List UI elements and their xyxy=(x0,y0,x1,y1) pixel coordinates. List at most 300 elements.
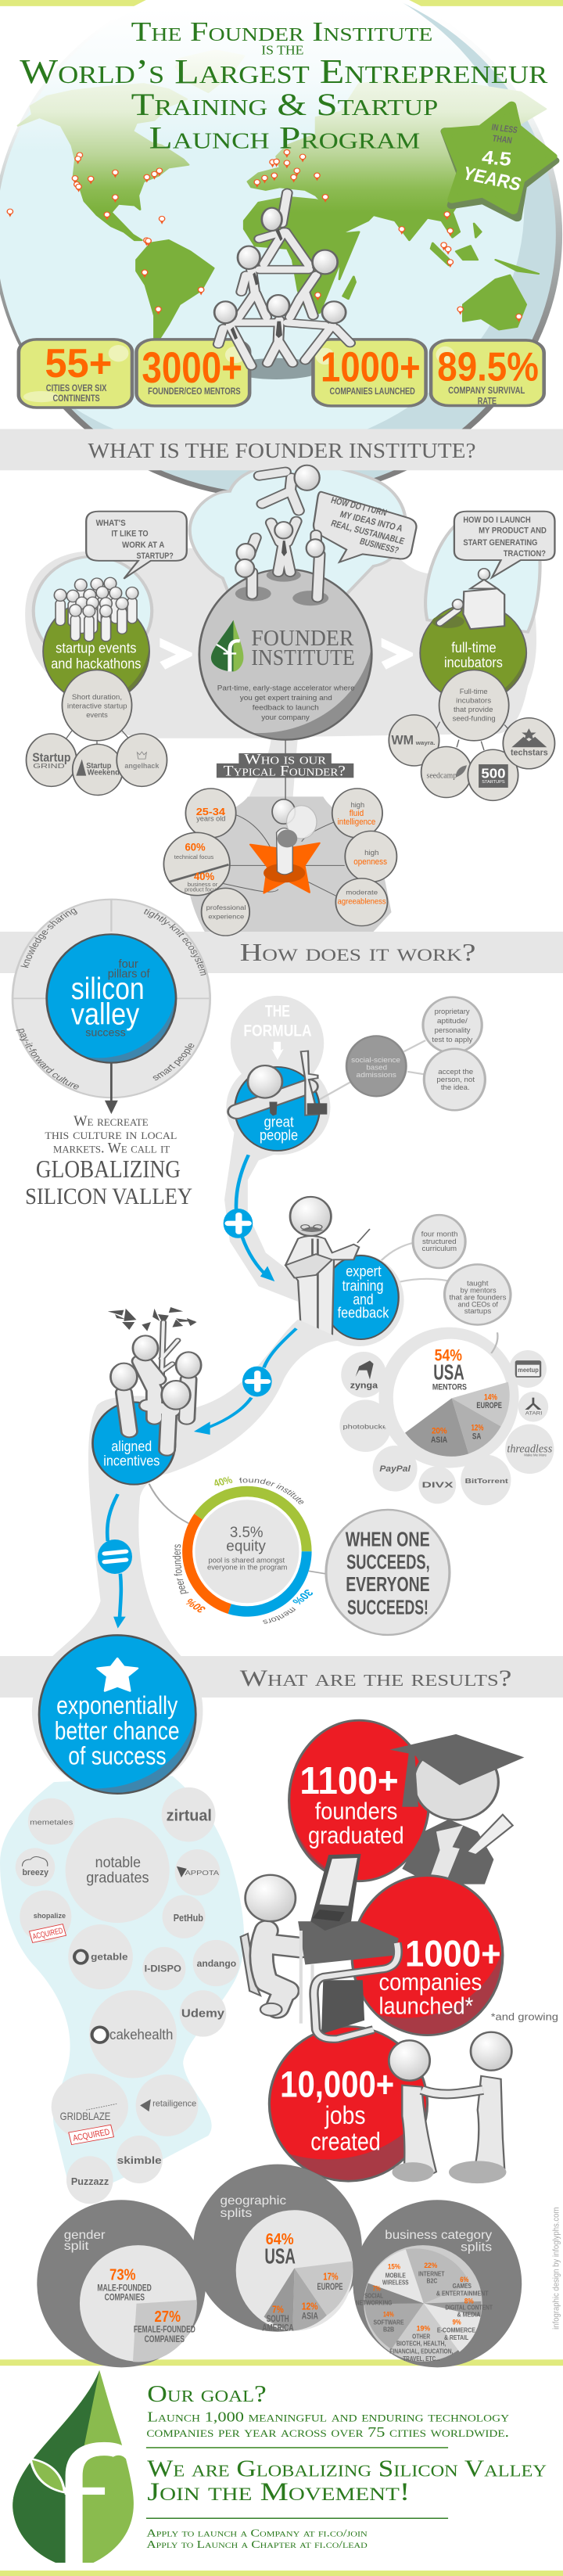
circle: accept the person: person, not xyxy=(436,1076,475,1083)
connector lines xyxy=(66,722,510,750)
trait: technical focus: 40% xyxy=(194,871,215,882)
logo circle: startup weekend: Weekend xyxy=(88,768,120,777)
panel: gender split: FEMALE-FOUNDED xyxy=(134,2324,195,2334)
panel: business category splits: INTERNET xyxy=(418,2271,444,2278)
logo: divx: DIVX xyxy=(422,1481,454,1489)
logo circle: startup weekend xyxy=(73,744,123,795)
logo: breezy xyxy=(16,1848,55,1886)
star badge: in less than 4.5 years: IN LESS xyxy=(491,122,518,135)
red circle: founders graduated: founders xyxy=(315,1798,397,1825)
logo: paypal xyxy=(373,1446,418,1492)
speech bubble: centre: MY IDEAS INTO A xyxy=(339,509,404,534)
circle: curriculum: four month xyxy=(421,1231,458,1238)
panel: geographic splits: 17% xyxy=(323,2272,339,2283)
panel: geographic splits: 64% xyxy=(266,2230,294,2247)
blue ball: exponentially better chance of success: of success xyxy=(68,1742,167,1770)
trait: professional experience: professional xyxy=(206,904,246,911)
badge: 89.5% survival xyxy=(431,340,544,406)
panel: geographic splits: EUROPE xyxy=(317,2281,343,2291)
founder with star and lightbulb xyxy=(250,799,320,893)
arrow down xyxy=(106,1063,117,1112)
speech bubble: centre: HOW DO I TURN xyxy=(330,495,388,518)
panel: geographic splits: AMERICA xyxy=(262,2323,294,2333)
trait: openness xyxy=(345,831,396,882)
panel: business category splits: E-COMMERCE xyxy=(437,2326,475,2334)
panel: business category splits: FINANCIAL, EDUCATION, xyxy=(389,2348,454,2355)
handshake figures xyxy=(389,2032,511,2177)
logo: memetales xyxy=(28,1798,75,1845)
logo: paypal: PayPal xyxy=(379,1464,411,1473)
panel: business category splits: B2C xyxy=(427,2278,437,2285)
trait: openness: high xyxy=(364,850,378,857)
laptop figure xyxy=(241,1854,399,2039)
logo: i-dispo: I-DISPO xyxy=(145,1963,181,1974)
blue arrow with plus xyxy=(194,1328,296,1435)
blue ball: aligned incentives: incentives xyxy=(103,1453,160,1468)
circle: taught by mentors: startups xyxy=(464,1308,491,1316)
title: The Founder Institute xyxy=(131,16,432,47)
quote circle: SUCCEEDS, xyxy=(346,1550,430,1573)
logo circle: wayra xyxy=(389,715,439,766)
apply links: Apply to launch a Company at fi.co/join xyxy=(146,2527,368,2539)
badge: 55+ cities xyxy=(19,340,132,408)
panel: business category splits: BIOTECH, HEALTH, xyxy=(396,2341,446,2348)
equity donut chart: 30% xyxy=(289,1587,315,1607)
badge: 1000+ companies: 1000+ xyxy=(321,344,421,391)
figures on sphere xyxy=(235,465,325,598)
panel: business category splits: OTHER xyxy=(412,2333,430,2341)
logo: shopalize with acquired stamp xyxy=(20,1891,71,1943)
section band: results xyxy=(0,1656,563,1698)
badge: 1000+ companies xyxy=(313,340,426,406)
link to equity xyxy=(149,1484,188,1523)
panel: business category splits xyxy=(353,2200,522,2367)
circle: curriculum xyxy=(413,1215,465,1268)
central sphere: Part-time, early-stage accelerator where xyxy=(217,684,355,692)
title: Training & Startup xyxy=(131,88,438,123)
section: aligned incentives and equity xyxy=(53,1314,554,1656)
circle: taught by mentors xyxy=(444,1264,511,1325)
logo: zirtual: zirtual xyxy=(167,1806,212,1824)
panel: business category splits: 14% xyxy=(383,2311,394,2319)
globalizing text xyxy=(25,1112,192,1209)
title: IS THE xyxy=(261,44,303,58)
chevron right xyxy=(382,638,413,670)
panel: gender split: gender xyxy=(64,2228,106,2242)
figure at podium xyxy=(432,569,504,629)
trait: age: years old xyxy=(196,816,225,823)
logo: threadless: Make Me More xyxy=(524,1453,547,1457)
four pillars diagram: knowledge-sharing xyxy=(20,908,77,968)
trait: technical focus: business or xyxy=(188,882,218,888)
speech bubble: centre: BUSINESS? xyxy=(358,536,400,555)
blue ball: exponentially better chance of success xyxy=(32,1629,203,1794)
section heading: WHAT IS THE FOUNDER INSTITUTE? xyxy=(88,439,475,462)
circle: notable graduates: graduates xyxy=(86,1869,149,1886)
globe xyxy=(0,0,559,497)
circle: notable graduates: notable xyxy=(95,1853,141,1871)
mentors pie: MENTORS xyxy=(432,1382,467,1392)
logo: gridblaze with acquired stamp xyxy=(52,2074,128,2145)
panel: geographic splits: USA xyxy=(264,2244,296,2269)
title xyxy=(20,16,547,156)
logo: gridblaze with acquired stamp: ACQUIRED xyxy=(72,2127,111,2143)
logo: photobucket: photobucket xyxy=(343,1424,389,1431)
four pillars diagram: smart people xyxy=(153,1044,194,1080)
circle: notable graduates xyxy=(66,1818,170,1923)
panel: gender split xyxy=(37,2200,206,2367)
red circle: jobs created: jobs xyxy=(325,2101,365,2129)
badge: 89.5% survival: RATE xyxy=(478,395,497,406)
circle: aptitude test xyxy=(423,997,482,1053)
blue ball: aligned incentives xyxy=(92,1402,175,1485)
panel: gender split: COMPANIES xyxy=(145,2334,185,2344)
logo: breezy: breezy xyxy=(22,1867,48,1877)
logo: divx xyxy=(418,1466,456,1504)
logo circle: techstars: techstars xyxy=(511,748,548,757)
logo: udemy xyxy=(180,1990,226,2037)
icon: Founder Institute leaf logo xyxy=(13,2370,134,2566)
panel: business category splits: 15% xyxy=(388,2263,400,2271)
thin links to founder xyxy=(223,814,345,898)
four pillars diagram: pay-it-forward culture xyxy=(16,1028,79,1089)
red circle: founders graduated: graduated xyxy=(308,1823,404,1849)
info circle: short duration: interactive startup xyxy=(67,702,127,710)
central sphere: INSTITUTE xyxy=(251,645,355,670)
blue ball: great people: people xyxy=(260,1126,298,1144)
section: splits and footer xyxy=(0,2136,563,2576)
circle: accept the person xyxy=(424,1049,485,1110)
grey path ribbon xyxy=(224,1113,298,1302)
panel: business category splits: SOCIAL xyxy=(364,2292,383,2300)
logo: skimble xyxy=(116,2136,163,2183)
graduate figure xyxy=(389,1734,524,1884)
logo: i-dispo xyxy=(142,1947,185,1990)
panel: business category splits: 22% xyxy=(424,2262,438,2269)
logo circle: 500 startups: STARTUPS xyxy=(482,779,505,785)
panel: business category splits: 6% xyxy=(460,2276,469,2283)
speech bubble: right xyxy=(454,512,554,577)
logo: getable: getable xyxy=(91,1951,127,1962)
central sphere: your company xyxy=(261,713,310,722)
panel: gender split: split xyxy=(64,2239,88,2253)
green ball: startup events: startup events xyxy=(56,641,136,656)
speech bubble: what's it like: WORK AT A xyxy=(122,540,164,550)
top band xyxy=(0,0,563,6)
links xyxy=(317,1040,425,1101)
circle: taught by mentors: taught xyxy=(467,1281,489,1288)
logo: bittorrent xyxy=(461,1455,511,1505)
globalizing text: GLOBALIZING xyxy=(36,1155,181,1183)
logo: photobucket xyxy=(339,1399,392,1452)
sky cloud: centre xyxy=(190,464,406,596)
goal text: Our goal? xyxy=(147,2381,267,2407)
logo: getable xyxy=(68,1924,133,1989)
info circle: full-time incubators xyxy=(439,670,509,741)
circle: aptitude test: personality xyxy=(435,1026,471,1035)
goal text xyxy=(146,2381,509,2440)
circle: accept the person: the idea. xyxy=(441,1083,470,1091)
mentors pie xyxy=(378,1328,519,1468)
logo circle: angelhack xyxy=(117,734,167,786)
star badge: in less than 4.5 years: THAN xyxy=(492,133,513,146)
badge: 3000+ mentors: 3000+ xyxy=(142,343,242,392)
trait: age: 25-34 xyxy=(196,807,225,818)
quote circle: SUCCEEDS! xyxy=(347,1596,429,1619)
shadow of handshake figures xyxy=(392,2161,506,2183)
circle: aptitude test: aptitude/ xyxy=(437,1017,468,1025)
bottom band xyxy=(0,2571,563,2576)
logo: zynga xyxy=(341,1352,386,1398)
logo: atari: ATARI xyxy=(525,1410,542,1416)
figure with syringe xyxy=(237,1051,327,1116)
panel: business category splits: SOFTWARE xyxy=(374,2319,404,2326)
info circle: full-time incubators: that provide xyxy=(454,706,493,714)
quote circle xyxy=(326,1510,450,1635)
badge: 55+ cities: CONTINENTS xyxy=(53,393,100,403)
blue ball: great people: great xyxy=(264,1113,294,1130)
mentors pie: EUROPE xyxy=(476,1400,502,1410)
four pillars diagram: four xyxy=(119,958,138,971)
crowd of people xyxy=(54,577,138,638)
speech bubble: what's it like xyxy=(86,512,187,579)
logo: andango xyxy=(193,1940,239,1986)
equity donut chart: mentors xyxy=(263,1607,296,1624)
globalizing text: markets. We call it xyxy=(53,1140,170,1156)
red circle: companies launched: companies xyxy=(378,1969,482,1996)
speech bubble: what's it like: WHAT'S xyxy=(96,518,126,528)
badge: 1000+ companies: COMPANIES LAUNCHED xyxy=(330,386,415,397)
badge: 3000+ mentors: FOUNDER/CEO MENTORS xyxy=(148,386,241,397)
trait: fluid intelligence: intelligence xyxy=(338,817,376,827)
call to action: Join the Movement! xyxy=(147,2477,410,2506)
trait: technical focus: product focus xyxy=(185,886,219,893)
panel: business category splits: DIGITAL CONTENT xyxy=(445,2305,493,2312)
four pillars diagram xyxy=(11,898,211,1098)
links xyxy=(381,1243,447,1282)
circle: aptitude test: test to apply xyxy=(432,1036,473,1044)
panel: gender split: COMPANIES xyxy=(105,2292,145,2302)
logo: skimble: skimble xyxy=(117,2155,162,2166)
logo circle: startup grind: GRIND xyxy=(33,763,65,770)
mentors pie: USA xyxy=(433,1360,464,1384)
circle: taught by mentors: and CEOs of xyxy=(457,1301,498,1309)
link xyxy=(491,1332,497,1353)
halo and blue ball: expert training xyxy=(314,1254,404,1346)
central sphere: you get expert training and xyxy=(240,694,332,702)
panel: geographic splits xyxy=(193,2165,362,2333)
title: Launch Program xyxy=(149,120,420,156)
speech bubble: centre xyxy=(314,492,416,562)
trait: agreeableness: agreeableness xyxy=(338,898,386,906)
link xyxy=(309,1571,325,1574)
trait: openness: openness xyxy=(353,857,387,867)
logo: pethub: PetHub xyxy=(174,1913,203,1924)
equity donut chart: everyone in the program xyxy=(207,1564,287,1572)
logo circle: 500 startups xyxy=(468,749,518,800)
world map continents xyxy=(18,50,546,338)
info circle: full-time incubators: seed-funding xyxy=(453,715,496,723)
group of four figures around tree xyxy=(110,1322,201,1450)
four pillars diagram: pillars of xyxy=(108,968,150,980)
speech bubble: what's it like: STARTUP? xyxy=(136,551,174,561)
logo: pethub xyxy=(163,1895,206,1938)
panel: business category splits: splits xyxy=(461,2240,492,2254)
logo: bittorrent: BitTorrent xyxy=(465,1478,508,1485)
graduate companies xyxy=(16,1787,239,2145)
logo: zynga: zynga xyxy=(350,1380,378,1390)
central sphere: FOUNDER xyxy=(251,626,353,650)
logo: retailigence: retailigence xyxy=(152,2098,196,2108)
panel: business category splits: & ENTERTAINMENT xyxy=(436,2290,489,2298)
trait: technical focus: 60% xyxy=(185,841,206,853)
panel: business category splits: WIRELESS xyxy=(382,2279,409,2287)
logo: shopalize with acquired stamp: ACQUIRED xyxy=(31,1927,64,1942)
equity donut chart: peer founders xyxy=(172,1544,189,1594)
goal text: companies per year across over 75 cities worldwide. xyxy=(146,2425,509,2440)
logo circle: techstars xyxy=(503,718,554,769)
apply links: Apply to Launch a Chapter at fi.co/lead xyxy=(146,2539,368,2550)
trait: technical focus: technical focus xyxy=(174,853,213,860)
trait: fluid intelligence xyxy=(332,789,382,838)
goal text: Launch 1,000 meaningful and enduring technology xyxy=(147,2410,509,2425)
section: how does it work xyxy=(11,878,512,1346)
logo circle: angelhack: angelhack xyxy=(124,763,160,771)
halo and blue ball: expert training: feedback xyxy=(338,1304,389,1321)
star badge: in less than 4.5 years: 4.5 xyxy=(481,146,513,170)
panel: business category splits: 19% xyxy=(417,2325,431,2333)
logo: atari xyxy=(518,1392,548,1422)
circle: admissions: based xyxy=(366,1064,387,1072)
formula bubble xyxy=(226,996,330,1155)
halo and blue ball: expert training: training xyxy=(342,1277,383,1294)
logo: meetup: meetup xyxy=(518,1367,539,1374)
logo circle: seedcamp: seedcamp xyxy=(427,771,457,780)
blue ball: exponentially better chance of success: better chance xyxy=(55,1717,180,1745)
mentor logos xyxy=(339,1350,554,1505)
sky cloud: right xyxy=(425,521,540,632)
circle: taught by mentors: that are founders xyxy=(449,1294,506,1302)
four pillars diagram: silicon xyxy=(71,972,145,1006)
grey ribbon xyxy=(50,1320,345,1658)
panel: business category splits: MOBILE xyxy=(385,2272,406,2280)
section: what is the founder institute xyxy=(0,429,563,932)
heading: what are the results: What are the results? xyxy=(240,1665,511,1691)
trait: technical focus xyxy=(163,832,230,896)
trait: fluid intelligence: fluid xyxy=(350,808,364,818)
circle: admissions: admissions xyxy=(357,1071,396,1080)
panel: business category splits: & RETAIL xyxy=(444,2334,468,2342)
quote circle: WHEN ONE xyxy=(346,1528,430,1550)
central sphere: feedback to launch xyxy=(253,703,319,712)
trait: professional experience xyxy=(202,888,249,936)
formula bubble: THE xyxy=(265,1002,290,1021)
red circle: founders graduated xyxy=(289,1720,429,1881)
info circle: full-time incubators: Full-time xyxy=(460,688,488,696)
heading: who is our typical founder: Who is our xyxy=(244,750,326,767)
sky cloud: left xyxy=(34,556,152,666)
circle: accept the person: accept the xyxy=(438,1068,473,1076)
central sphere xyxy=(199,569,371,740)
info circle: short duration xyxy=(62,670,132,741)
red circle: founders graduated: 1100+ xyxy=(299,1760,399,1802)
panel: business category splits: business category xyxy=(385,2228,493,2242)
mentors pie: 14% xyxy=(484,1392,497,1402)
blue ball: aligned incentives: aligned xyxy=(111,1438,152,1454)
panel: business category splits: & MEDIA xyxy=(457,2312,480,2319)
logo: appota xyxy=(175,1849,220,1895)
panel: business category splits: B2B xyxy=(383,2326,394,2333)
mentors pie: ASIA xyxy=(431,1435,447,1444)
logo: andango: andango xyxy=(197,1958,236,1969)
red circle: companies launched xyxy=(352,1876,503,2035)
logo: zirtual xyxy=(162,1787,216,1841)
blue ball: great people xyxy=(235,1067,320,1151)
credit: infographic design by infoglyphs.com xyxy=(552,2208,561,2330)
red circle: companies launched: 1000+ xyxy=(405,1932,501,1974)
tree leaves top xyxy=(108,1307,195,1322)
trait: age xyxy=(185,789,236,838)
star badge: in less than 4.5 years xyxy=(445,105,554,218)
panel: geographic splits: splits xyxy=(220,2206,252,2220)
logo: udemy: Udemy xyxy=(181,2007,224,2020)
halo and blue ball: expert training: and xyxy=(353,1291,374,1308)
connector stem xyxy=(285,740,287,799)
four pillars diagram: valley xyxy=(71,998,140,1031)
panel: business category splits: 8% xyxy=(464,2298,474,2305)
panel: gender split: MALE-FOUNDED xyxy=(97,2283,152,2293)
city pins xyxy=(7,149,522,322)
speech bubble: centre: REAL, SUSTAINABLE xyxy=(330,519,406,546)
panel: geographic splits: 7% xyxy=(272,2305,284,2316)
globalizing text: this culture in local xyxy=(45,1126,177,1142)
green ball: startup events: and hackathons xyxy=(51,656,141,672)
quote circle: EVERYONE xyxy=(346,1573,430,1596)
logo: memetales: memetales xyxy=(30,1819,73,1827)
formula bubble: FORMULA xyxy=(243,1022,312,1040)
divider xyxy=(146,2447,448,2448)
red circle: jobs created: 10,000+ xyxy=(280,2063,394,2105)
trait: agreeableness xyxy=(335,878,387,926)
professor figure xyxy=(285,1197,370,1342)
equity donut chart: 3.5% xyxy=(230,1524,264,1540)
circle: curriculum: structured xyxy=(422,1238,457,1246)
mentors pie: 12% xyxy=(471,1423,484,1432)
trait: professional experience: experience xyxy=(208,913,245,921)
globalizing text: SILICON VALLEY xyxy=(25,1184,192,1209)
logo: puzzazz: Puzzazz xyxy=(71,2176,109,2187)
chevrons xyxy=(160,638,192,670)
grey connecting shape xyxy=(25,548,536,799)
human pyramid xyxy=(214,192,350,366)
logo circle: startup grind: Startup xyxy=(32,750,71,764)
logo circle: seedcamp xyxy=(421,746,472,798)
logo circle: wayra: WM xyxy=(392,732,414,747)
panel: business category splits: GAMES xyxy=(453,2283,472,2290)
heading: how does it work: How does it work? xyxy=(240,939,475,966)
trait: fluid intelligence: high xyxy=(351,802,364,809)
mentors pie: 54% xyxy=(435,1346,462,1364)
mentors pie: 20% xyxy=(432,1426,447,1435)
star badge: in less than 4.5 years: YEARS xyxy=(460,163,524,195)
founder area trunk xyxy=(187,796,392,932)
logo: threadless xyxy=(505,1425,554,1474)
equity donut chart: founder institute xyxy=(239,1478,303,1504)
band xyxy=(0,429,563,470)
red circle: jobs created xyxy=(269,2027,427,2182)
equity donut chart: 30% xyxy=(183,1596,209,1615)
circle: admissions xyxy=(346,1036,406,1096)
